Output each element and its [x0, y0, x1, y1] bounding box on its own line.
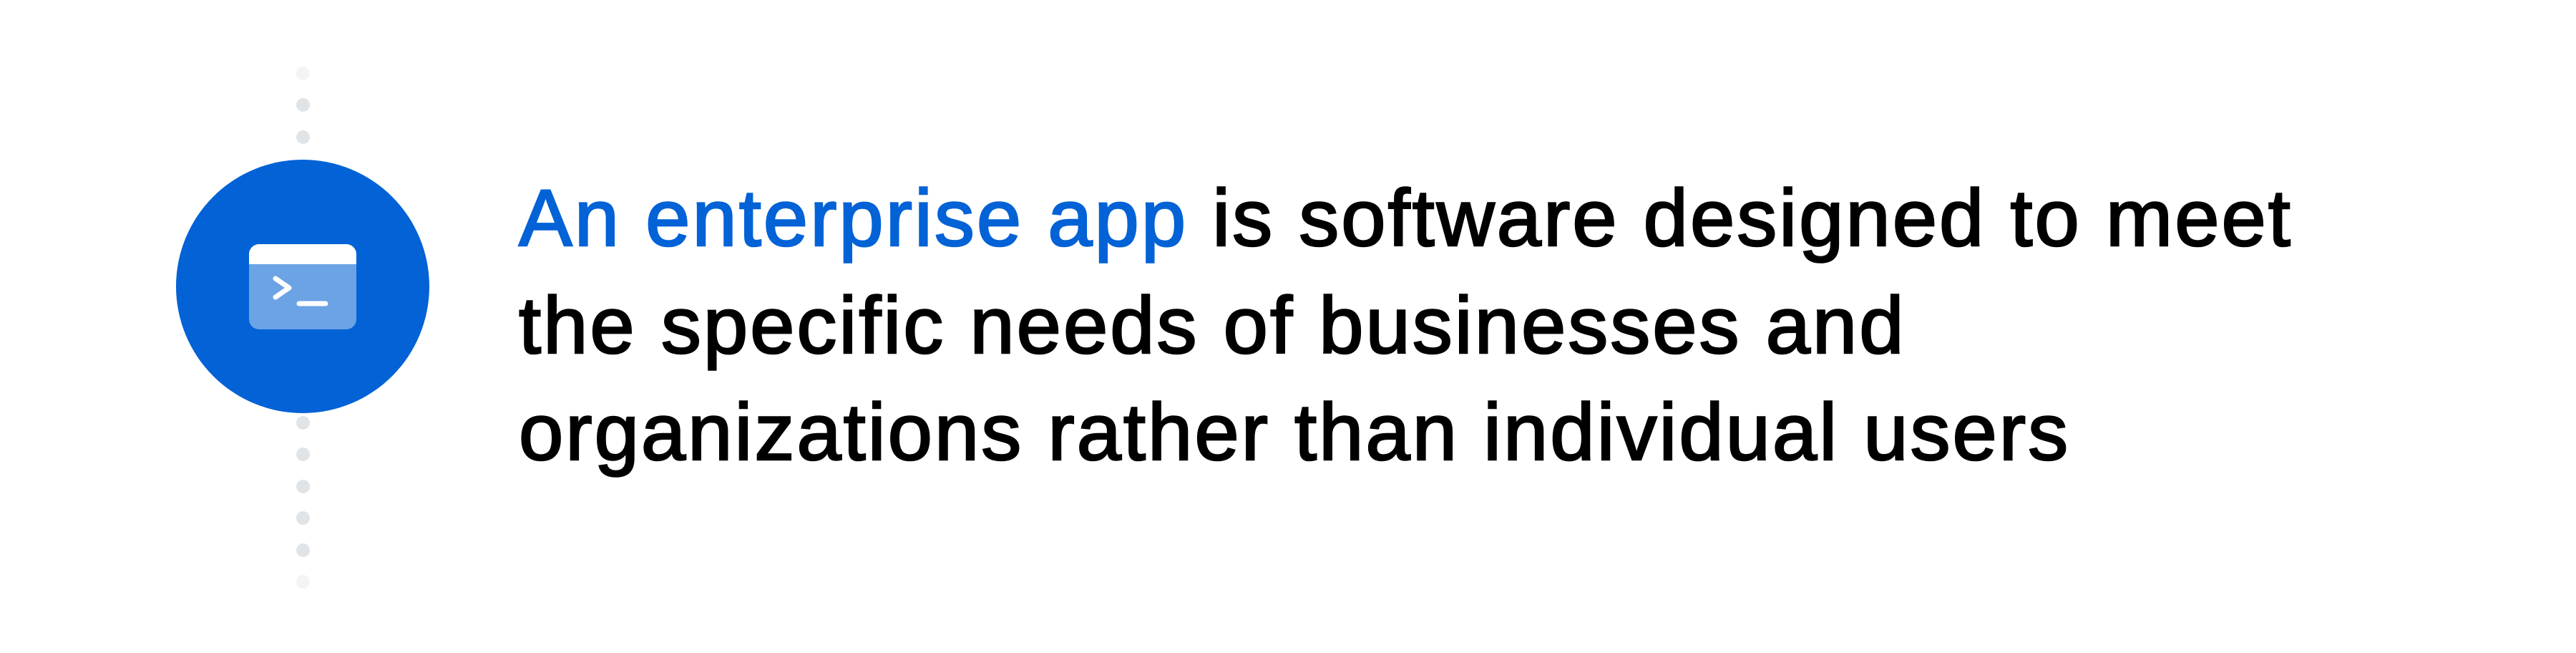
timeline dots	[296, 67, 310, 589]
icon: blue circle with terminal window	[176, 160, 429, 413]
text block: definition: the specific needs of businesses and	[519, 281, 1906, 370]
text block: definition: organizations rather than individual users	[519, 387, 2070, 477]
text block: definition: An enterprise app is software designed to meet	[519, 173, 2293, 263]
icon: terminal window	[249, 244, 356, 329]
text block: definition	[517, 173, 2293, 478]
